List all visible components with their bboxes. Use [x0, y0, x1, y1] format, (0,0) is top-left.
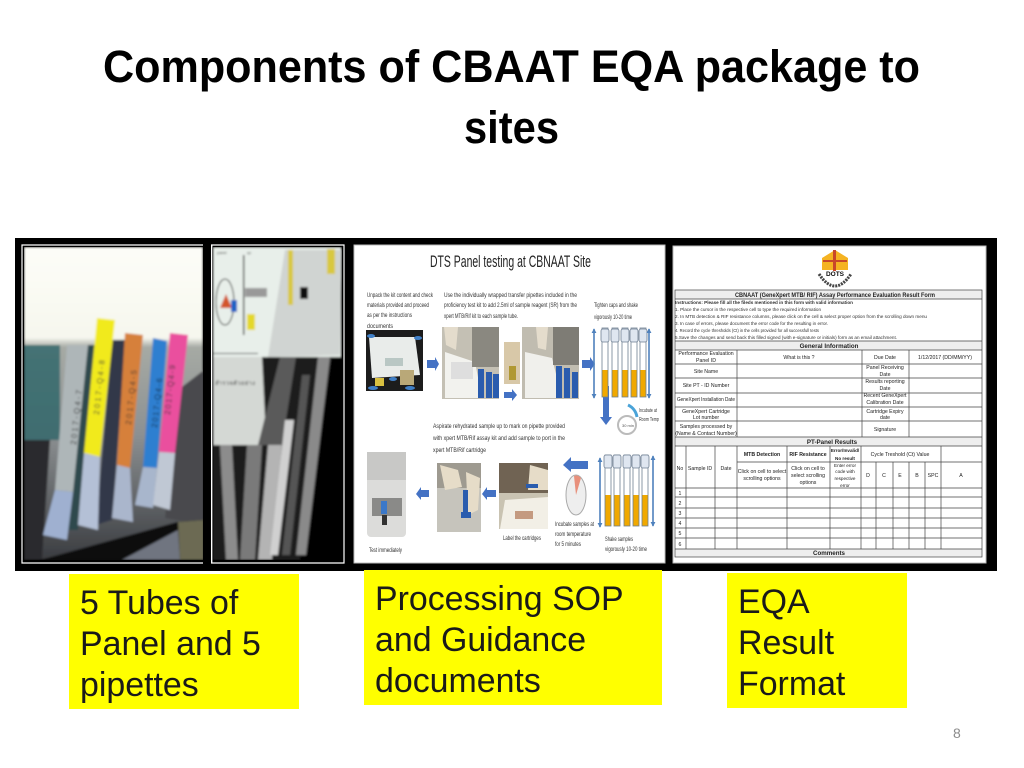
form table: 5 — [679, 531, 682, 537]
tube: pink label — [153, 333, 188, 510]
form table: No — [677, 466, 683, 472]
panel: processing SOP document — [354, 245, 665, 563]
form table: A — [959, 473, 963, 479]
form table: Click on cell to — [791, 466, 825, 472]
form table: PT-Panel Results — [807, 439, 858, 446]
label: tubes and pipettes — [69, 574, 299, 709]
step texts: Label the cartridges — [503, 535, 541, 542]
label: processing SOP: Processing SOP — [375, 580, 624, 618]
form table: D — [866, 473, 870, 479]
step texts: materials provided and proceed — [367, 302, 429, 309]
form table: date — [880, 415, 890, 421]
form table: 3 — [679, 511, 682, 517]
form table: Date — [880, 372, 891, 378]
form table: 1/12/2017 (DD/MM/YY) — [918, 355, 972, 361]
title: sites — [464, 102, 559, 153]
page number: 8 — [953, 725, 961, 741]
form table: 1 — [679, 491, 682, 497]
tube: grey label — [43, 345, 88, 540]
label: processing SOP: documents — [375, 662, 541, 700]
label: processing SOP — [364, 570, 662, 705]
tube: blue label: 2017-Q4-6 — [150, 377, 164, 428]
label: tubes and pipettes: 5 Tubes of — [80, 584, 239, 622]
instructions: 3. In case of errors, please document the error code for the resulting in error. — [675, 321, 828, 327]
form table: 2 — [679, 501, 682, 507]
form table: error — [840, 483, 850, 488]
form table: No result — [835, 456, 855, 461]
form table: Error/Invalid/ — [831, 448, 860, 453]
instructions: 4. Record the cycle thresholds (Ct) in the cells provided for all successfull tests — [675, 328, 819, 334]
form table: Samples processed by — [680, 424, 733, 430]
panel: pipettes photo: qc — [247, 250, 251, 255]
instructions: 1. Place the cursor in the respective cell to type the required information — [675, 307, 821, 313]
form table: Recent GeneXpert — [864, 393, 907, 399]
step texts: vigorously 10-20 time — [605, 546, 647, 553]
divider strip between photos — [211, 245, 212, 563]
form table: code with — [835, 469, 855, 474]
panel: EQA result form — [673, 246, 986, 563]
form table: (Name & Contact Number) — [675, 431, 737, 437]
step texts: Tighten caps and shake — [594, 302, 638, 309]
label: EQA result format — [727, 573, 907, 708]
form table: Lot number — [693, 415, 719, 421]
title: Components of CBAAT EQA package to — [103, 41, 920, 92]
black image frame — [15, 238, 997, 571]
panel: pipettes photo — [211, 245, 344, 563]
tube: orange label — [112, 333, 143, 522]
step texts: as per the instructions — [367, 312, 413, 319]
form table: SPC — [928, 473, 939, 479]
label: processing SOP: and Guidance — [375, 621, 586, 659]
form table: Cartridge Expiry — [866, 409, 904, 415]
form table: Signature — [874, 427, 896, 433]
form table — [675, 290, 982, 557]
DOTS logo — [819, 250, 851, 286]
tube: yellow label: 2017-Q4-8 — [92, 359, 107, 415]
step texts: with xpert MTB/Rif assay kit and add sample to port in the — [432, 435, 565, 442]
form table: Enter error — [834, 463, 856, 468]
form table: B — [915, 473, 919, 479]
label: EQA result format: Format — [738, 665, 846, 703]
step texts: Use the individually wrapped transfer pipettes included in the — [444, 292, 577, 299]
form table: 4 — [679, 521, 682, 527]
doc title: DTS Panel testing at CBNAAT Site — [430, 252, 591, 271]
timer icon — [566, 475, 586, 515]
form table: Date — [721, 466, 732, 472]
step photos — [366, 327, 579, 537]
step texts: Incubate at — [639, 408, 657, 414]
instructions: 2. In MTB detection & RIF resistance columns, please click on the cell & select proper option from the scrolling down menu — [675, 314, 927, 320]
instructions: 5.Save the changes and send back this filled signed (with e-signature or initials) form as an email attachment. — [675, 335, 897, 341]
title — [103, 41, 920, 153]
form table: Cycle Treshold (Ct) Value — [871, 452, 929, 458]
lower shaken tubes — [600, 455, 653, 527]
tube: grey label: 2017-Q4-7 — [69, 389, 84, 445]
form table: scrolling options — [743, 476, 781, 482]
tube: blue label — [135, 338, 167, 508]
label: EQA result format: Result — [738, 624, 835, 662]
form table: Performance Evaluation — [678, 351, 734, 357]
clock icon: 30 min — [622, 423, 634, 428]
step texts: Shake samples — [605, 536, 633, 543]
form table: C — [882, 473, 886, 479]
step texts: proficiency test kit to add 2.5ml of sample reagent (SR) from the — [444, 302, 577, 309]
form table: Click on cell to select — [738, 469, 787, 475]
form table: Sample ID — [688, 466, 712, 472]
tube: orange label: 2017-Q4-5 — [124, 369, 139, 425]
step texts: Test immediately — [369, 547, 403, 554]
label: tubes and pipettes: pipettes — [80, 666, 199, 704]
label: tubes and pipettes: Panel and 5 — [80, 625, 261, 663]
form table: MTB Detection — [744, 452, 780, 458]
form table: Panel ID — [696, 358, 716, 364]
upper shaken tubes — [594, 328, 649, 398]
form table: Panel Receiving — [866, 365, 904, 371]
form table: General Information — [800, 343, 859, 350]
form table: RIF Resistance — [789, 452, 827, 458]
panel: pipettes photo: panel — [217, 250, 227, 255]
form table: CBNAAT (GeneXpert MTB/ RIF) Assay Performance Evaluation Result Form — [735, 292, 935, 299]
step texts: xpert MTB/Rif kit to each sample tube. — [444, 313, 518, 320]
form table: Date — [880, 386, 891, 392]
step texts: Incubate samples at — [555, 521, 594, 528]
step texts: Room Temp — [639, 417, 659, 423]
clock icon — [618, 405, 637, 434]
form table: respective — [835, 476, 856, 481]
tube: pink label: 2017-Q4-9 — [163, 364, 177, 415]
tube: yellow label — [78, 318, 115, 530]
form table: select scrolling — [791, 473, 825, 479]
form table: GeneXpert Installation Date — [677, 397, 735, 403]
label: EQA result format: EQA — [738, 583, 810, 621]
form table: GeneXpert Cartridge — [682, 409, 730, 415]
step texts: vigorously 10-20 time — [594, 314, 632, 321]
DOTS logo: DOTS — [826, 271, 845, 278]
instructions — [675, 300, 927, 341]
form table: E — [898, 473, 902, 479]
form table: Due Date — [874, 355, 896, 361]
form table: What is this ? — [783, 355, 815, 361]
form table: Comments — [813, 550, 846, 557]
step texts: documents — [367, 323, 394, 330]
step texts — [367, 292, 659, 554]
instructions: Instructions: Please fill all the fileds mentioned in this form with valid information — [675, 300, 853, 306]
step texts: Aspirate rehydrated sample up to mark on pipette provided — [433, 423, 565, 430]
step texts: room temperature — [555, 531, 591, 538]
form table: Site PT - ID Number — [683, 383, 730, 389]
form table: 6 — [679, 542, 682, 548]
panel: pipettes photo: สำรวจตัวอย่าง — [215, 380, 255, 387]
step texts: xpert MTB/Rif cartridge — [433, 447, 486, 454]
form table: Results reporting — [865, 379, 905, 385]
form table: Calibration Date — [866, 400, 904, 406]
step texts: Unpack the kit content and check — [367, 292, 434, 299]
form table: Site Name — [694, 369, 718, 375]
panel: tubes photo — [22, 245, 204, 563]
flow arrows — [416, 357, 612, 500]
step texts: for 5 minutes — [555, 541, 582, 548]
form table: options — [800, 480, 817, 486]
